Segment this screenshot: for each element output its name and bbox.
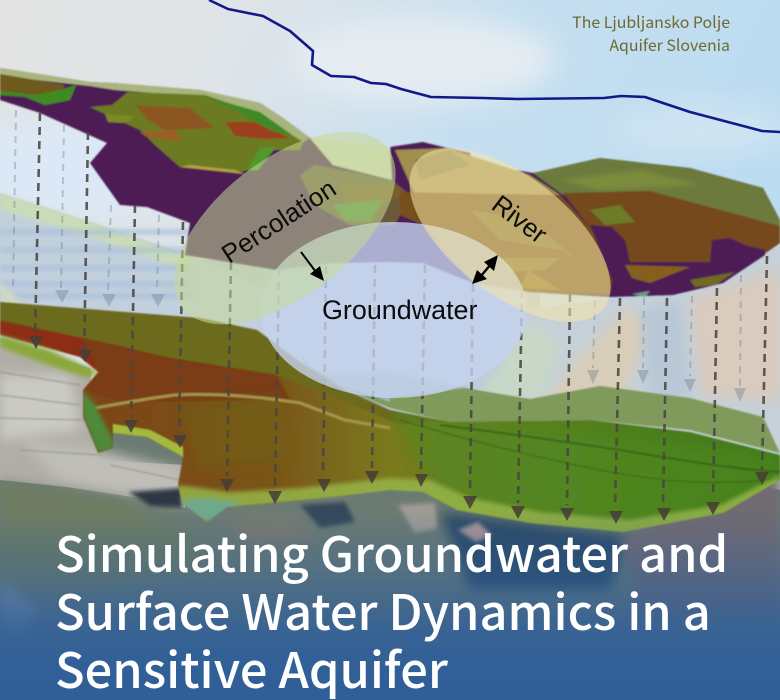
- river line: [209, 0, 780, 132]
- sky background: [0, 0, 780, 420]
- bright green rim left: [0, 335, 98, 378]
- river ellipse: [380, 115, 640, 355]
- background mountains photo: [0, 193, 780, 700]
- pale upper band: [300, 352, 780, 453]
- arrow: percolation to groundwater: [301, 252, 324, 281]
- location caption: The Ljubljansko Polje: [572, 10, 730, 33]
- title: Surface Water Dynamics in a: [55, 574, 711, 645]
- pale seams: [95, 394, 390, 428]
- location caption: Aquifer Slovenia: [609, 33, 730, 56]
- bottom blue gradient: [0, 510, 780, 700]
- green centre shading: [188, 399, 263, 464]
- olive top band: [0, 302, 440, 425]
- dashed percolation arrows: [29, 113, 769, 524]
- pale rim behind percolation ellipse: [310, 138, 392, 180]
- location caption: [572, 10, 730, 56]
- purple zone right: [590, 225, 765, 297]
- percolation label: Percolation: [216, 173, 341, 269]
- faint dashed percolation arrows: [13, 110, 746, 402]
- right surface bands: [533, 158, 780, 297]
- top rim of the left surface: [0, 68, 310, 142]
- middle terrain patches: [300, 148, 620, 295]
- lower model layer: [0, 302, 780, 536]
- title: Simulating Groundwater and: [55, 516, 728, 587]
- arrow: river and groundwater exchange: [472, 255, 498, 284]
- percolation ellipse: [141, 94, 429, 362]
- terrain patches left: [0, 74, 303, 174]
- groundwater label: Groundwater: [322, 295, 477, 325]
- groundwater ellipse: [261, 222, 527, 398]
- upper model layer: [0, 68, 780, 297]
- green and yellow base rim: [175, 475, 780, 536]
- red-brown band: [0, 322, 130, 372]
- river label: River: [486, 189, 553, 250]
- title: [55, 516, 728, 700]
